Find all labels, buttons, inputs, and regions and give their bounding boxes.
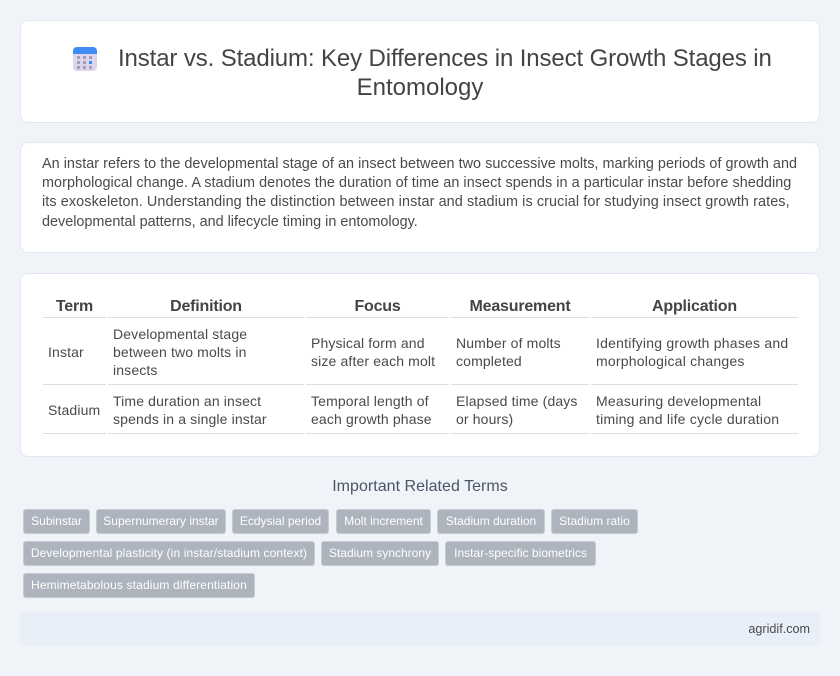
table row: instar: Developmental stage	[113, 326, 247, 342]
related terms heading: Important Related Terms	[332, 478, 508, 495]
panel: title card	[20, 20, 820, 123]
panel: intro text card	[20, 142, 820, 253]
table row: instar: size after each molt	[311, 353, 435, 369]
table header row: Focus	[354, 298, 401, 315]
table row: instar: Number of molts	[456, 335, 561, 351]
related terms tags: Subinstar	[31, 514, 82, 528]
related terms tags: Stadium duration	[446, 514, 536, 528]
table row: instar	[43, 326, 798, 385]
table row: stadium	[43, 393, 798, 434]
intro paragraph: morphological change. A stadium denotes the duration of time an insect spends in a particular instar before shedding	[42, 175, 791, 191]
table header row: Definition	[170, 298, 242, 315]
intro paragraph	[42, 156, 797, 230]
table row: stadium: or hours)	[456, 411, 513, 427]
table row: stadium: Time duration an insect	[113, 393, 261, 409]
table row: instar: insects	[113, 362, 158, 378]
related terms tags: Stadium synchrony	[329, 546, 431, 560]
table row: stadium: Elapsed time (days	[456, 393, 578, 409]
title: Entomology	[357, 74, 483, 101]
table header row: Measurement	[470, 298, 570, 315]
table row: stadium: each growth phase	[311, 411, 432, 427]
title	[118, 45, 772, 101]
table row: instar: Instar	[48, 344, 84, 360]
related terms tags: Stadium ratio	[559, 514, 630, 528]
table row: stadium: spends in a single instar	[113, 411, 267, 427]
table header row	[43, 298, 798, 318]
table header row: Term	[56, 298, 93, 315]
title: Instar vs. Stadium: Key Differences in Insect Growth Stages in	[118, 45, 772, 72]
comparison table	[43, 298, 798, 434]
related terms tags: Developmental plasticity (in instar/stadium context)	[31, 546, 307, 560]
related terms tags: Ecdysial period	[240, 514, 321, 528]
table row: stadium: Temporal length of	[311, 393, 429, 409]
footer source text: agridif.com	[748, 622, 810, 636]
table row: stadium: timing and life cycle duration	[596, 411, 779, 427]
table row: stadium: Stadium	[48, 402, 100, 418]
related terms tags: Supernumerary instar	[103, 514, 219, 528]
icon: calendar	[73, 47, 97, 71]
related terms tags	[23, 509, 638, 598]
table row: instar: Physical form and	[311, 335, 425, 351]
table row: stadium: Measuring developmental	[596, 393, 761, 409]
related terms tags: Molt increment	[344, 514, 423, 528]
intro paragraph: developmental patterns, and lifecycle timing in entomology.	[42, 214, 418, 230]
table header row: Application	[652, 298, 737, 315]
table row: instar: Identifying growth phases and	[596, 335, 788, 351]
panel: comparison table card	[20, 273, 820, 457]
intro paragraph: its exoskeleton. Understanding the distinction between instar and stadium is crucial for studying insect growth rates,	[42, 194, 790, 210]
related terms tags: Hemimetabolous stadium differentiation	[31, 578, 247, 592]
table row: instar: completed	[456, 353, 522, 369]
intro paragraph: An instar refers to the developmental stage of an insect between two successive molts, marking periods of growth and	[42, 156, 797, 172]
table row: instar: morphological changes	[596, 353, 745, 369]
related terms tags: Instar-specific biometrics	[454, 546, 587, 560]
footer bar	[20, 612, 820, 646]
table row: instar: between two molts in	[113, 344, 247, 360]
